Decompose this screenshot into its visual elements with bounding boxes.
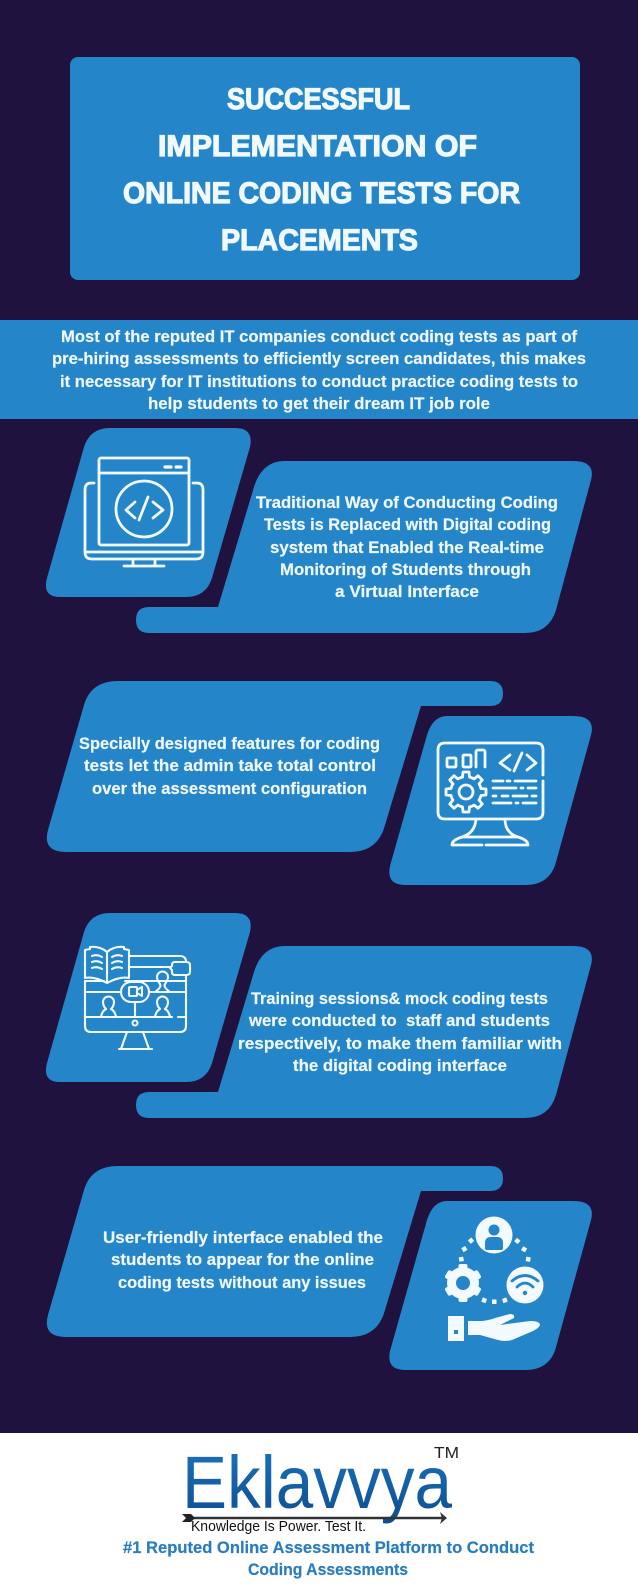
panel: step 1 digital coding system	[46, 428, 592, 633]
step 4 text: coding tests without any issues	[118, 1274, 366, 1292]
title	[123, 83, 520, 257]
step 4 text card	[47, 1166, 503, 1337]
step 1 text: system that Enabled the Real-time	[270, 539, 544, 557]
step 3 text: the digital coding interface	[293, 1057, 507, 1075]
step 1 text: Traditional Way of Conducting Coding	[256, 494, 558, 512]
panel: step 4 user-friendly interface	[47, 1166, 592, 1370]
step 3 text: respectively, to make them familiar with	[238, 1035, 562, 1053]
step 3 icon card	[46, 913, 251, 1082]
step 3 text	[238, 990, 562, 1075]
step 2 text card	[47, 681, 503, 852]
step 3 text: were conducted to staff and students	[248, 1012, 550, 1030]
step 2 text: over the assessment configuration	[92, 780, 367, 798]
step 1 text	[256, 494, 558, 601]
footer tagline: Coding Assessments	[248, 1560, 408, 1579]
step 1 text: Tests is Replaced with Digital coding	[264, 516, 551, 534]
intro text: Most of the reputed IT companies conduct coding tests as part of	[61, 328, 578, 346]
step 2 text: tests let the admin take total control	[84, 757, 376, 775]
step 4 text: User-friendly interface enabled the	[103, 1229, 383, 1247]
step 4 text	[103, 1229, 383, 1292]
intro text: help students to get their dream IT job role	[148, 395, 490, 413]
footer	[0, 1433, 638, 1595]
icon: monitor with gear and code	[438, 743, 543, 845]
intro text	[52, 328, 586, 413]
step 4 text: students to appear for the online	[111, 1251, 374, 1269]
icon: online classroom monitor	[85, 947, 190, 1049]
footer tagline	[123, 1538, 534, 1579]
panel: step 2 admin control	[47, 681, 592, 885]
title: PLACEMENTS	[221, 224, 418, 257]
footer tagline: #1 Reputed Online Assessment Platform to Conduct	[123, 1538, 534, 1557]
title panel	[70, 57, 580, 280]
intro banner	[0, 320, 638, 419]
logo: Eklavvya: Knowledge Is Power. Test It.	[191, 1518, 366, 1535]
step 1 text: a Virtual Interface	[335, 583, 479, 601]
step 1 text: Monitoring of Students through	[280, 561, 531, 579]
step 1 text card	[136, 461, 592, 633]
step 4 icon card	[389, 1201, 592, 1370]
step 2 icon card	[389, 716, 592, 885]
title: ONLINE CODING TESTS FOR	[123, 177, 520, 210]
step 2 text: Specially designed features for coding	[79, 735, 380, 753]
step 2 text	[79, 735, 380, 798]
step 3 text: Training sessions& mock coding tests	[251, 990, 548, 1008]
step 3 text card	[136, 946, 592, 1118]
intro text: it necessary for IT institutions to conduct practice coding tests to	[60, 373, 578, 391]
icon: code window on monitor	[85, 458, 203, 566]
logo: Eklavvya: Eklavvya	[182, 1441, 453, 1524]
panel: step 3 training sessions	[46, 913, 592, 1118]
title: SUCCESSFUL	[227, 83, 410, 116]
step 1 icon card	[46, 428, 251, 597]
intro text: pre-hiring assessments to efficiently screen candidates, this makes	[52, 350, 586, 368]
title: IMPLEMENTATION OF	[158, 130, 477, 163]
logo: Eklavvya: TM	[434, 1445, 459, 1462]
icon: user, gear and wifi over open hand	[444, 1216, 544, 1341]
